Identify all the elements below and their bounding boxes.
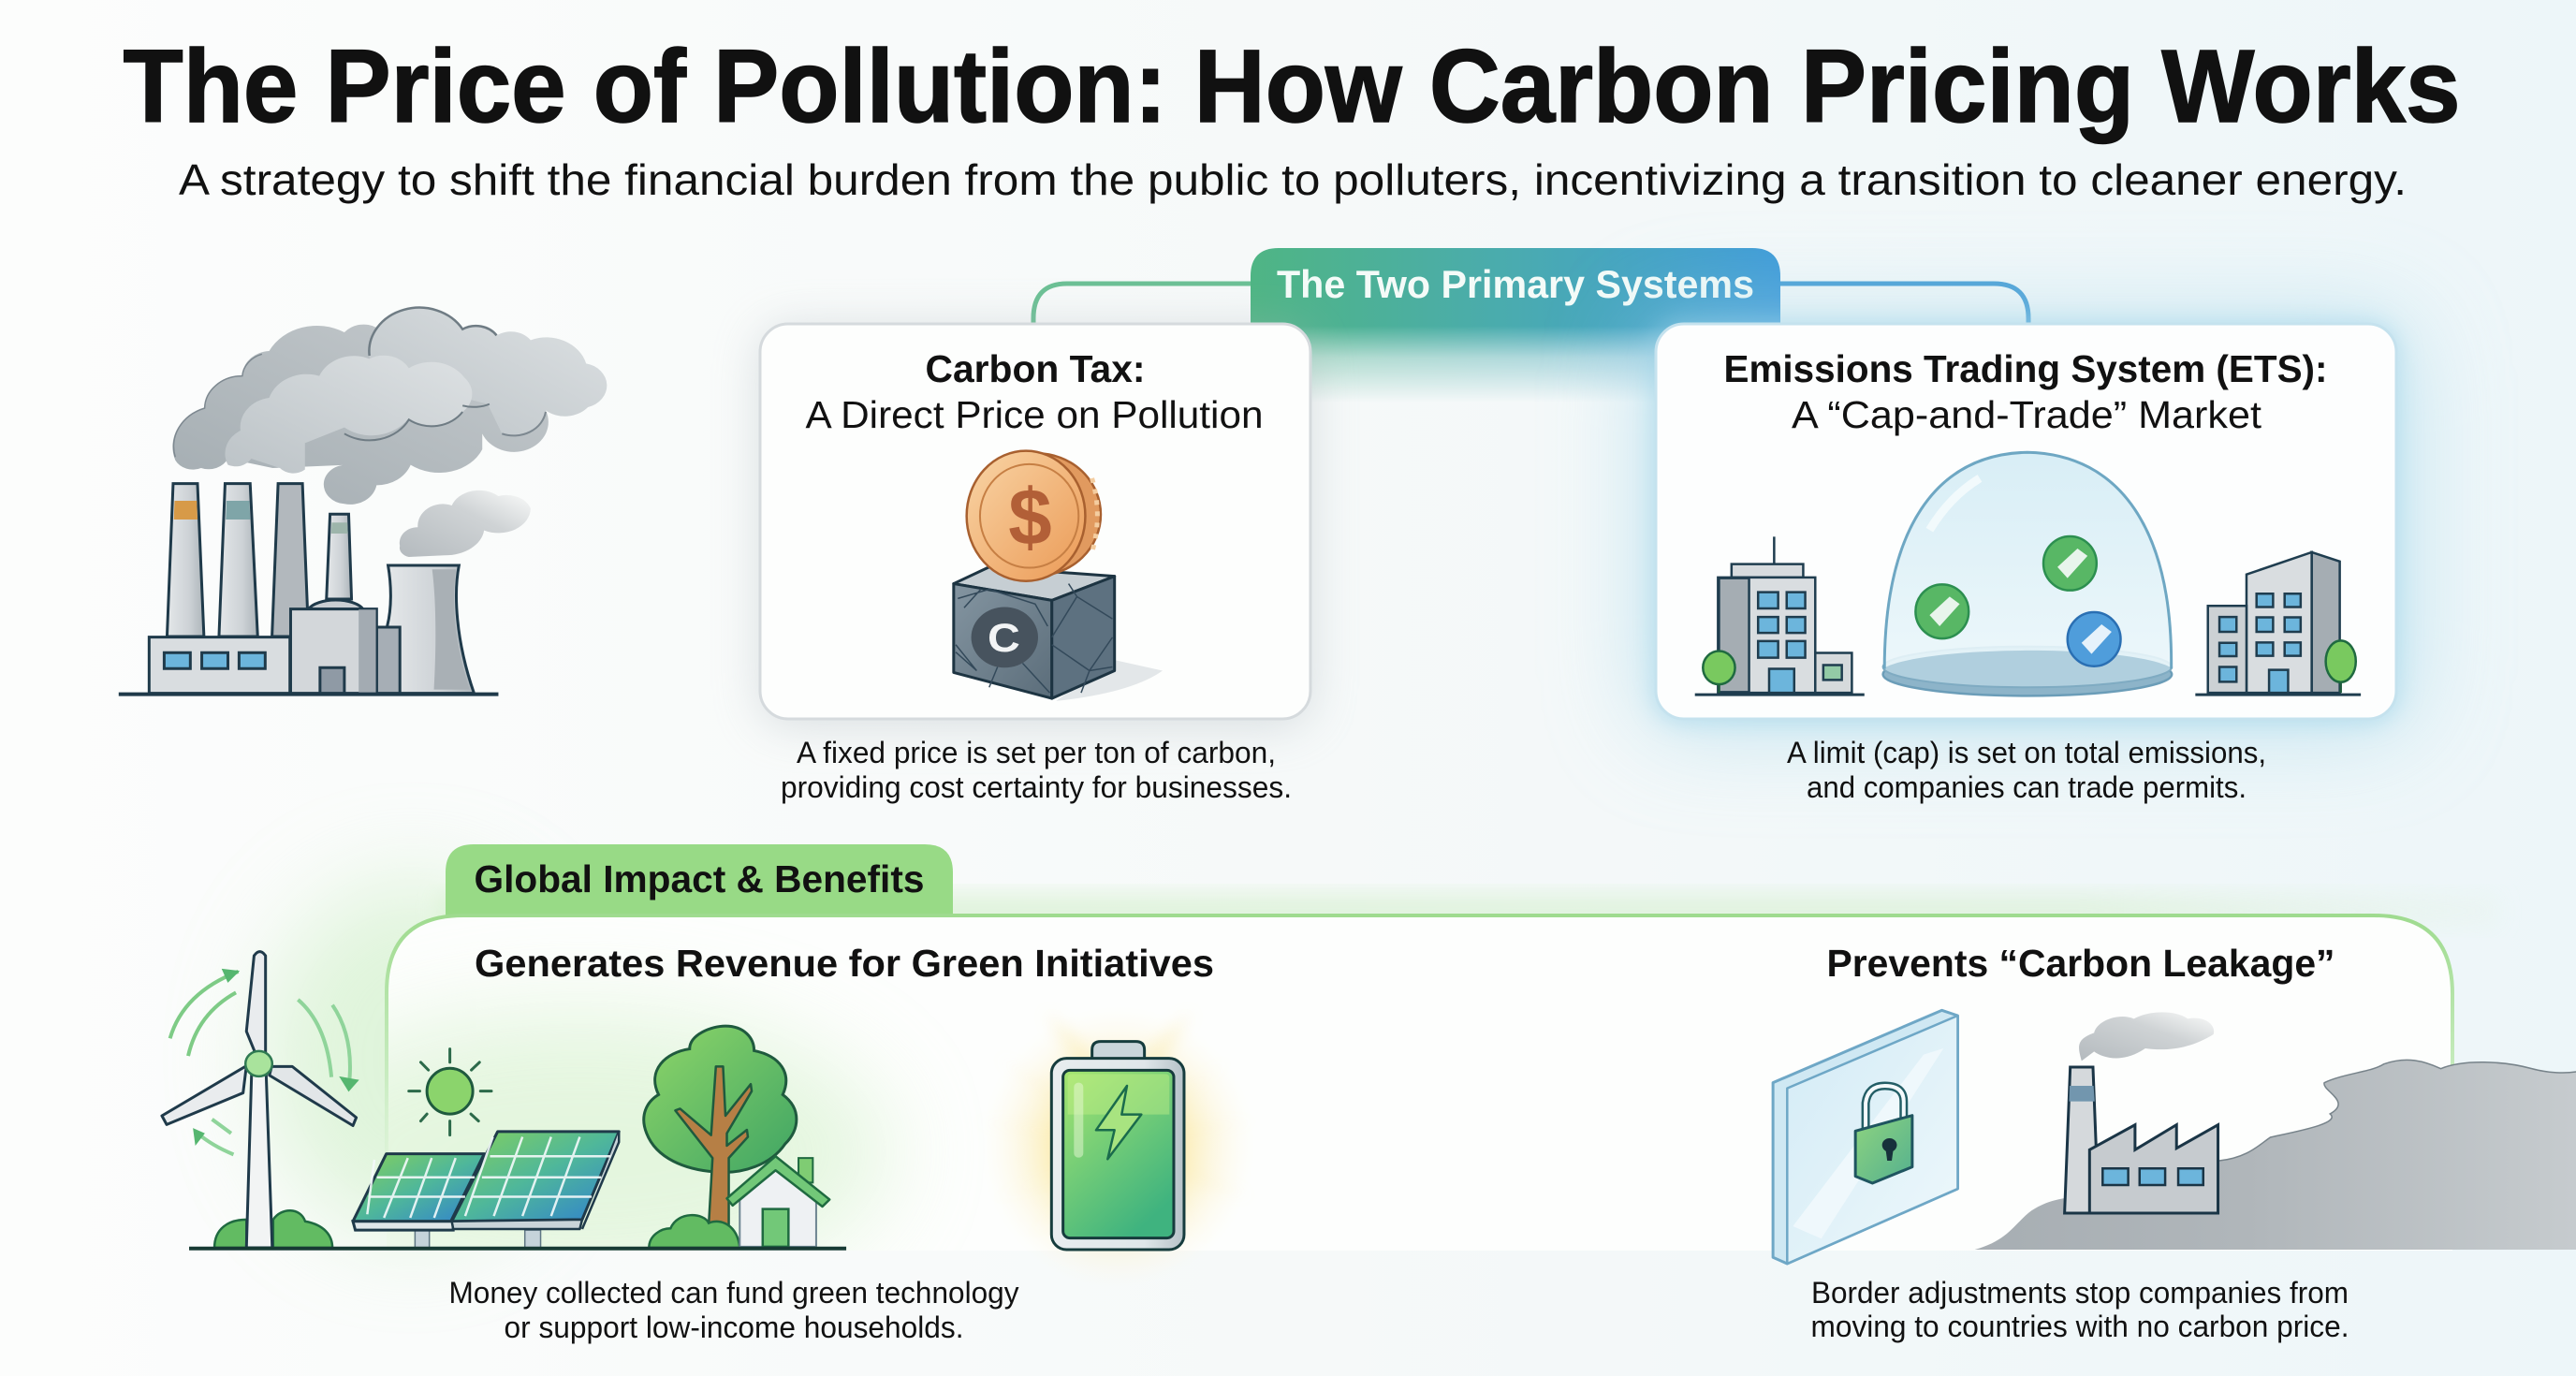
icon: polluted hillside <box>1975 1060 2576 1250</box>
revenue description <box>449 1276 1018 1344</box>
carbon tax description <box>781 736 1292 804</box>
carbon tax heading: Carbon Tax: <box>925 347 1146 390</box>
leakage description <box>1810 1276 2349 1343</box>
icon: smoking factory <box>119 308 607 695</box>
icon: border glass wall with padlock <box>1773 1010 1957 1264</box>
green glow around impact panel <box>262 880 562 1236</box>
icon: glass dome with permits between buildings <box>1695 452 2361 695</box>
revenue description: Money collected can fund green technology <box>449 1276 1018 1310</box>
title: The Price of Pollution: How Carbon Pricing Works <box>124 29 2460 144</box>
panel: emissions trading system <box>1638 314 2415 735</box>
leakage description: Border adjustments stop companies from <box>1811 1276 2349 1310</box>
icon: glowing battery <box>971 1006 1261 1287</box>
carbon tax description: A fixed price is set per ton of carbon, <box>797 736 1276 769</box>
icon: relocated factory with smoke <box>2065 1012 2218 1213</box>
carbon tax description: providing cost certainty for businesses. <box>781 770 1292 804</box>
global impact tab: Global Impact & Benefits <box>474 857 925 900</box>
revenue description: or support low-income households. <box>504 1310 964 1344</box>
ETS description: A limit (cap) is set on total emissions, <box>1787 736 2266 769</box>
icon: wind turbine, solar panels, tree and house <box>162 952 846 1249</box>
ETS subheading: A “Cap-and-Trade” Market <box>1792 393 2262 436</box>
panel: global impact and benefits <box>385 844 2454 1251</box>
panel: carbon tax <box>760 324 1310 725</box>
ETS heading: Emissions Trading System (ETS): <box>1724 347 2327 390</box>
heading pill: the two primary systems <box>1251 248 1780 403</box>
carbon tax subheading: A Direct Price on Pollution <box>805 393 1264 436</box>
icon: coin on carbon block <box>954 451 1163 701</box>
global impact tab <box>446 844 953 917</box>
icon: coin on carbon block: C <box>988 615 1020 660</box>
icon: coin on carbon block: $ <box>1008 473 1052 562</box>
heading pill: the two primary systems: The Two Primary Systems <box>1277 262 1754 306</box>
leakage heading: Prevents “Carbon Leakage” <box>1827 942 2334 985</box>
connector: green line to carbon tax <box>1033 284 1251 328</box>
subtitle: A strategy to shift the financial burden from the public to polluters, incentivizing a transition to cleaner energy. <box>179 155 2407 204</box>
ETS description: and companies can trade permits. <box>1807 770 2247 804</box>
revenue heading: Generates Revenue for Green Initiatives <box>475 942 1214 985</box>
leakage description: moving to countries with no carbon price. <box>1810 1310 2349 1343</box>
ETS description <box>1787 736 2266 804</box>
connector: blue line to ETS <box>1780 284 2028 328</box>
